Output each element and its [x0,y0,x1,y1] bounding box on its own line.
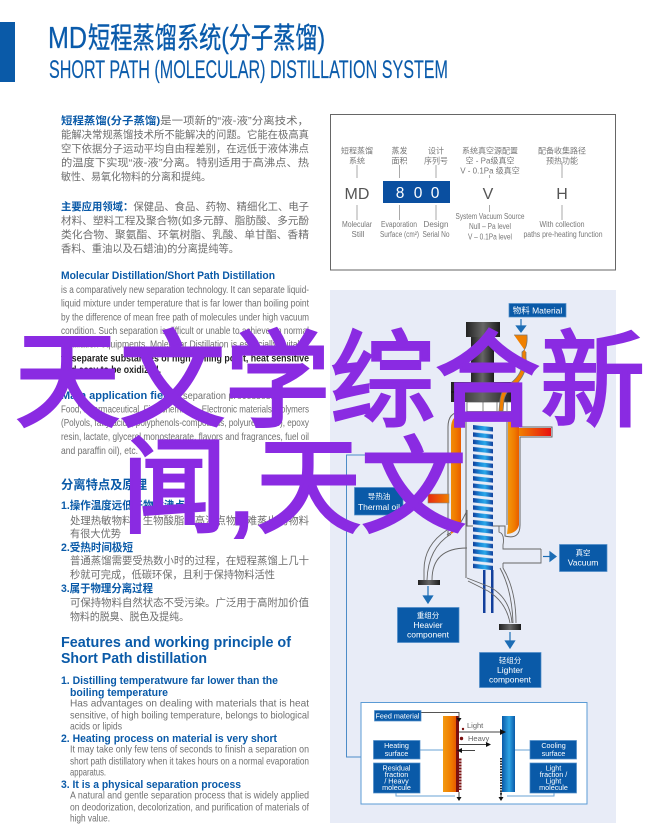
label: light fraction: Light [546,764,561,772]
labels: English model fields: Molecular [342,220,372,229]
text block: Molecular distillation: distillation equipments. Molecular Distillation is especially suitable [61,340,309,351]
model code MD 800 V H: 8 [396,185,404,202]
model code MD 800 V H [345,181,568,203]
text block: separation characteristics (Chinese) [61,477,309,623]
labels: English model fields: Null – Pa level [469,222,511,231]
heading: features and working principle [61,634,292,667]
text block: Molecular distillation: Molecular Distillation/Short Path Distillation [61,270,275,282]
label: heating surface: Heating [384,741,409,750]
model code MD 800 V H: H [556,186,568,203]
title: 短程蒸馏系统(分子蒸馏) [88,22,325,55]
labels: English model fields: paths pre-heating function [524,230,602,239]
model code MD 800 V H: 0 [414,185,423,202]
label: thermal oil: 导热油 [368,491,390,501]
labels: Chinese model fields [341,146,586,176]
overlay headline: purple text [15,324,645,547]
labels: Chinese model fields: V - 0.1Pa 级真空 [460,166,520,176]
text block: Chinese application fields: 类化合物、聚氨酯、环氧树脂、乳酸、单甘酯、香精 [61,228,310,241]
text block: Chinese introduction: 敏性、易氧化物料的分离和提纯。 [61,170,211,183]
text block: separation characteristics (Chinese): 有很大优势 [70,527,121,540]
text block: feature list: 1. Distilling temperatwure far lower than the [61,675,278,687]
icon: material feed funnel and tube [499,335,527,411]
text block: separation characteristics (Chinese): 秒就可完成，低碳环保，且利于保持物料活性 [70,568,275,581]
text block: separation characteristics (Chinese): 分离特点及原理 [61,477,147,492]
text block: feature list: acids or lipids [70,722,122,732]
label: lighter component [480,652,541,688]
text block: feature list: short path distillatory when it takes hours on a normal evaporation [70,756,309,768]
labels: English model fields: Still [352,230,365,239]
label: cooling surface [530,740,576,759]
text block: Chinese application fields: 香料、重油以及石蜡油)的分离提纯等。 [61,242,239,255]
labels: English model fields: V – 0.1Pa level [468,232,512,242]
text block: Molecular distillation: to separate substances of high boiling point, heat sensitive [61,354,309,364]
icon: condenser coil [473,425,494,613]
label: residual fraction: Residual [383,764,411,772]
labels: Chinese model fields: 预热功能 [546,156,578,166]
text block: feature list: on deodorization, decolorization, and purification of materials of [70,802,309,814]
text block: feature list: apparatus. [70,768,106,778]
label: heavier component: component [407,630,450,640]
model code MD 800 V H: 0 [431,185,440,202]
text block: Chinese introduction: 空下依据分子运动平均自由程差别，在远低于液体沸点 [61,142,309,155]
labels: English model fields: With collection [540,220,584,229]
leader lines [396,750,554,796]
text block: Molecular distillation: by the difference of mean free path of molecules under high vacuum [61,312,309,323]
title [48,20,448,84]
label: heating surface: surface [385,749,408,758]
arrows [424,319,556,648]
icon: outlet tubes [424,526,541,623]
text block: Chinese introduction: 短程蒸馏(分子蒸馏) 是一项新的“液-液”分离技术， [61,114,309,127]
molecules and arrows [421,712,506,801]
heading: features and working principle: Short Path distillation [61,650,207,667]
labels: Chinese model fields: 系统真空源配置 [462,146,518,156]
title: SHORT PATH (MOLECULAR) DISTILLATION SYSTEM [49,56,448,84]
text block: separation characteristics (Chinese): 物料的脱臭、脱色及提纯。 [70,610,189,623]
text block: Chinese introduction [61,114,310,183]
labels: Chinese model fields: 系统 [349,156,365,166]
label: heavier component: Heavier [413,620,443,630]
overlay headline: purple text: 天文学综合新 [15,324,645,441]
label: lighter component: component [489,674,532,684]
text block: feature list: boiling temperature [70,687,168,699]
labels: Chinese model fields: 序列号 [424,156,448,166]
text block: feature list: A natural and gentle separation process that is widely applied [70,790,309,802]
text block: separation characteristics (Chinese): 普通蒸馏需要受热数小时的过程，在短程蒸馏上几十 [70,554,309,567]
header accent bar [0,22,15,82]
label: vacuum: 真空 [576,548,590,558]
label: residual fraction: molecule [382,783,411,792]
text block: feature list: sensitive, of high boiling temperature, belongs to biological [70,710,309,722]
text block: feature list: high value. [70,814,110,824]
labels: English model fields [342,212,602,242]
text block: separation characteristics (Chinese): 3.属于物理分离过程 [61,581,153,595]
labels: English model fields: Design [424,220,448,229]
panel: separation principle detail [361,702,587,804]
label: cooling surface: surface [542,749,565,758]
text block: separation characteristics (Chinese): 处理热敏物料、生物酸脂、高沸点物、难蒸出的物料 [70,514,309,527]
labels: English model fields: Serial No [422,230,450,239]
text block: Main application fields [61,390,310,457]
icon: vessel jacket with thermal oil [428,411,552,578]
labels: English model fields: Evaporation [381,220,417,229]
label: material [509,304,566,317]
molecules and arrows: Heavy [468,734,490,743]
label: heating surface [374,740,420,759]
text block: Chinese application fields [61,200,310,255]
model code MD 800 V H: V [483,186,494,203]
label: lighter component: 轻组分 [499,655,522,665]
text block: Chinese application fields: 材料、塑料工程及聚合物(如多元醇、脂肪酸、多元酚 [61,214,310,227]
icon: cooling column [502,716,515,792]
text block: Main application fields: separation processes: [183,391,273,402]
label: thermal oil: Thermal oil [358,502,400,512]
icon: motor and flange [451,322,514,412]
label: light fraction: Light [546,776,561,786]
text block: separation characteristics (Chinese): 2.受热时间极短 [61,540,133,554]
labels: Chinese model fields: 蒸发 [392,146,408,156]
icon: collars [418,580,440,585]
text block: Chinese introduction: 的温度下实现“液-液”分离。特别适用于高沸点、热 [61,156,310,169]
label: light fraction [530,763,576,793]
icon: heating column [443,716,459,792]
text block: Main application fields: Main application fields [61,390,179,402]
title: MD [48,20,87,55]
text block: Main application fields: and paraffin oil), etc. [61,446,138,457]
text block: Molecular distillation: liquid mixture under temperature that is far lower than boiling point [61,299,309,310]
label: vacuum [560,544,607,572]
text block: separation characteristics (Chinese): 可保持物料自然状态不受污染。广泛用于高附加价值 [70,596,309,609]
label: light fraction: molecule [539,783,568,792]
label: residual fraction [374,763,420,793]
text block: Main application fields: Food, Pharmaceutical, Fine chemicals, Electronic materials, polymers [61,404,309,415]
labels: Chinese model fields: 空 - Pa级真空 [466,156,514,166]
text block: feature list: It may take only few tens of seconds to finish a separation on [70,744,309,756]
text block: Main application fields: resin, lactate, glycerol monostearate, flavors and fragrances, fuel oil [61,432,309,443]
text block: Chinese introduction: 能解决常规蒸馏技术所不能解决的问题。它能在极高真 [61,128,309,141]
label: light fraction: fraction / [540,770,567,779]
heading: features and working principle: Features and working principle of [61,634,292,651]
label: heavier component: 重组分 [417,610,440,620]
text block: feature list [61,675,309,824]
text block: separation characteristics (Chinese): 1.操作温度远低于物质沸点 [61,498,185,512]
labels: Chinese model fields: 面积 [392,156,408,166]
label: residual fraction: / Heavy [384,776,409,786]
text block: Molecular distillation: and easy to be oxidized. [61,365,161,376]
labels: English model fields: System Vacuum Source [456,212,525,221]
text block: Chinese application fields: 主要应用领域：保健品、食品、药物、精细化工、电子 [61,200,309,213]
model code MD 800 V H: MD [345,186,369,203]
labels: Chinese model fields: 配备收集路径 [538,146,586,156]
connector: thermal oil to detail box [346,455,448,757]
label: lighter component: Lighter [497,665,523,675]
panel: distillation diagram [330,290,616,823]
label: vacuum: Vacuum [568,558,598,568]
labels: Chinese model fields: 短程蒸馏 [341,146,373,156]
panel: model code specification [330,114,616,270]
text block: feature list: 3. It is a physical separation process [61,779,241,791]
label: heavier component [398,608,459,642]
label: feed material: Feed material [376,712,420,720]
label: material: 物料 Material [513,306,562,316]
text block: Molecular distillation [61,270,309,376]
labels: Chinese model fields: 设计 [428,146,444,156]
overlay headline: purple text: 闻,天文 [122,430,466,547]
text block: feature list: 2. Heating process on material is very short [61,733,277,745]
label: residual fraction: fraction [385,770,408,779]
text block: feature list: Has advantages on dealing with materials that is heat [70,698,309,710]
label: cooling surface: Cooling [541,741,566,750]
text block: Molecular distillation: is a comparatively new separation technology. It can separate liquid- [61,285,309,296]
label: thermal oil [354,488,403,515]
labels: English model fields: Surface (cm²) [380,230,419,239]
text block: Main application fields: (Polyols, fatty acids, polyphenols-compounds, polyurethanes), epoxy [61,418,310,429]
text block: Molecular distillation: condition. Such separation is difficult or unable to achieve on normal [61,326,309,337]
molecules and arrows: Light [467,721,484,730]
